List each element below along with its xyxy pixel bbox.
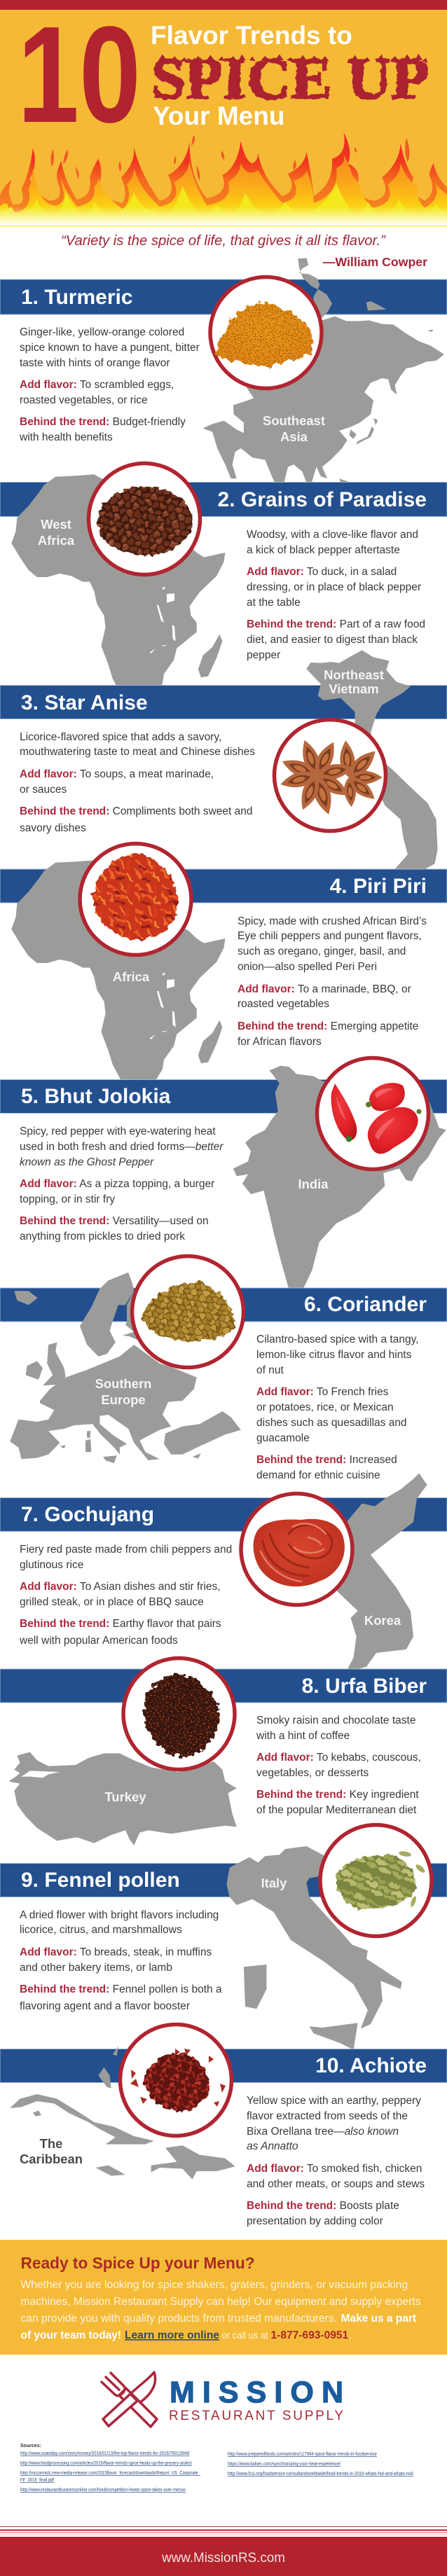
map label: West	[41, 517, 71, 532]
text: coriander description: dishes such as quesadillas and	[256, 1417, 407, 1429]
title: 4. Piri Piri: 4. Piri Piri	[330, 875, 427, 898]
text: star anise description: mouthwatering taste to meat and Chinese dishes	[20, 746, 255, 758]
map label: Caribbean	[20, 2152, 83, 2166]
photo circle: coriander	[132, 1256, 244, 1367]
body copy: Whether you are looking for spice shakers, graters, grinders, or vacuum packing	[21, 2279, 408, 2291]
text: star anise description: or sauces	[20, 784, 67, 796]
title: 10. Achiote: 10. Achiote	[315, 2054, 427, 2077]
text: achiote description: as Annatto	[247, 2140, 298, 2152]
heading band 4	[0, 869, 447, 903]
text: star anise description: savory dishes	[20, 822, 86, 834]
source links right column: https://www.kalsec.com/synchronizing-your-heat-experience/	[228, 2462, 341, 2467]
source links left column: http://mccormick.new-media-release.com/2015flavor_forecast/downloads/Report_US_Corporate_	[20, 2471, 200, 2476]
flames illustration	[0, 132, 447, 226]
panel: 4 Piri Piri	[0, 843, 447, 1083]
source links left column	[20, 2451, 200, 2493]
text: coriander description: guacamole	[256, 1432, 310, 1444]
source links left column: FF_2015_final.pdf	[20, 2478, 54, 2483]
text: coriander description: lemon-like citrus flavor and hints	[256, 1349, 412, 1361]
heading band 5	[0, 1080, 447, 1114]
map label: The	[40, 2136, 62, 2151]
text: urfa biber description: Behind the trend: Key ingredient	[256, 1789, 419, 1801]
panel: 10 Achiote	[0, 2024, 447, 2227]
body copy: 1-877-693-0951	[270, 2329, 349, 2341]
source links left column: http://www.restaurantbusinessonline.com/food/competition-heats-spice-takes-over-menus	[20, 2488, 186, 2493]
logo: Mission Restaurant Supply	[102, 2372, 343, 2427]
footer	[0, 2526, 447, 2576]
text: urfa biber description	[256, 1715, 421, 1816]
text: fennel description: licorice, citrus, and marshmallows	[20, 1924, 182, 1936]
panel: 5 Bhut Jolokia	[0, 1058, 447, 1291]
text: achiote description: Bixa Orellana tree—also known	[247, 2126, 399, 2138]
title: 6. Coriander: 6. Coriander	[304, 1293, 427, 1316]
text: urfa biber description: vegetables, or desserts	[256, 1767, 369, 1779]
text: gochujang description: glutinous rice	[20, 1559, 83, 1571]
source links right column: http://www.preparedfoods.com/articles/117694-spice-flavor-trends-in-foodservice	[228, 2452, 377, 2457]
text: achiote description: flavor extracted from seeds of the	[247, 2110, 408, 2122]
map label: Europe	[101, 1392, 146, 1407]
text: bhut jolokia description: Add flavor: As a pizza topping, a burger	[20, 1178, 214, 1190]
text: turmeric description: roasted vegetables, or rice	[20, 394, 148, 406]
heading: Ready to Spice Up your Menu?	[21, 2254, 255, 2272]
title line: SPICE UP: SPICE UP	[151, 46, 429, 111]
text: grains description: pepper	[247, 649, 280, 661]
panel: 3 Star Anise	[0, 650, 447, 871]
text: star anise description: Behind the trend: Compliments both sweet and	[20, 805, 252, 817]
text: grains description: at the table	[247, 597, 301, 609]
photo circle: star anise	[275, 720, 385, 831]
text: coriander description	[256, 1334, 418, 1481]
source links left column: http://www.usatoday.com/story/money/2016/01/13/the-top-flavor-trends-for-2016/78312948/	[20, 2451, 190, 2456]
text: grains description: a kick of black pepper aftertaste	[247, 544, 400, 556]
title line: Flavor Trends to: Flavor Trends to	[151, 21, 352, 50]
body copy: Learn more online	[125, 2329, 219, 2341]
title line: Your Menu: Your Menu	[153, 102, 284, 130]
text: coriander description: demand for ethnic cuisine	[256, 1469, 380, 1481]
text: urfa biber description: Smoky raisin and chocolate taste	[256, 1715, 415, 1726]
text: bhut jolokia description: anything from pickles to dried pork	[20, 1231, 185, 1242]
text: star anise description: Licorice-flavored spice that adds a savory,	[20, 731, 221, 743]
photo circle: fennel	[320, 1825, 432, 1936]
body copy	[21, 2279, 421, 2341]
wordmark: MISSION: MISSION	[170, 2376, 343, 2409]
text: bhut jolokia description: Spicy, red pepper with eye-watering heat	[20, 1126, 216, 1137]
title: 2. Grains of Paradise: 2. Grains of Paradise	[218, 488, 427, 511]
map: The Caribbean	[10, 2047, 235, 2180]
text: fennel description: and other bakery items, or lamb	[20, 1962, 172, 1974]
map label: Southeast	[263, 413, 325, 428]
text: piri piri description: Add flavor: To a marinade, BBQ, or	[238, 983, 411, 995]
photo circle: gochujang	[241, 1493, 352, 1605]
text: achiote description: Behind the trend: Boosts plate	[247, 2200, 399, 2212]
text: grains description: diet, and easier to digest than black	[247, 634, 418, 646]
map label: Africa	[113, 969, 150, 984]
photo circle: turmeric	[210, 277, 322, 388]
quote: “Variety is the spice of life, that gives it all its flavor.”	[61, 233, 386, 249]
source links left column: http://www.foodprocessing.com/articles/2015/flavor-trends-spice-heats-up-the-grocery-aisles/	[20, 2461, 192, 2466]
text: coriander description: or potatoes, rice, or Mexican	[256, 1401, 394, 1413]
text: gochujang description: grilled steak, or in place of BBQ sauce	[20, 1596, 204, 1608]
text: urfa biber description: Add flavor: To kebabs, couscous,	[256, 1752, 421, 1764]
yellow background	[0, 2240, 447, 2355]
map label: Turkey	[105, 1789, 146, 1804]
yellow header background	[0, 10, 447, 226]
text: turmeric description: with health benefits	[19, 431, 113, 443]
text: grains description: dressing, or in place of black pepper	[247, 581, 421, 593]
text: grains description: Woodsy, with a clove-like flavor and	[247, 529, 418, 541]
map: India	[233, 1066, 446, 1291]
text: turmeric description: spice known to have a pungent, bitter	[20, 342, 200, 354]
title: 5. Bhut Jolokia: 5. Bhut Jolokia	[21, 1085, 171, 1108]
map: Southern Europe	[10, 1273, 241, 1463]
panel: 7 Gochujang	[0, 1473, 447, 1672]
text: grains description: Behind the trend: Part of a raw food	[247, 618, 425, 630]
sources heading: Sources:	[20, 2444, 41, 2449]
footer band	[0, 2537, 447, 2576]
map: Asia	[203, 258, 444, 490]
map: West Africa	[11, 474, 225, 698]
map label: Korea	[364, 1613, 401, 1628]
text: achiote description	[247, 2095, 425, 2227]
text: piri piri description	[238, 915, 427, 1048]
top red bar	[0, 0, 447, 10]
map label: Africa	[38, 533, 75, 548]
map: Northeast Vietnam	[306, 650, 438, 871]
text: gochujang description: Fiery red paste made from chili peppers and	[20, 1544, 232, 1556]
panel: 1 Turmeric	[0, 258, 447, 490]
text: piri piri description: such as oregano, ginger, basil, and	[238, 946, 406, 957]
heading band 9	[0, 1863, 447, 1897]
panel: 2 Grains of Paradise	[0, 464, 447, 698]
panel: 6 Coriander	[0, 1256, 447, 1481]
heading band 8	[0, 1669, 447, 1703]
text: fennel description: Add flavor: To breads, steak, in muffins	[20, 1946, 212, 1958]
title: 9. Fennel pollen: 9. Fennel pollen	[21, 1869, 180, 1892]
map: Africa	[11, 860, 225, 1083]
map: Italy	[226, 1846, 402, 2050]
map label: India	[298, 1177, 329, 1191]
body copy: machines, Mission Restaurant Supply can help! Our equipment and supply experts	[21, 2296, 421, 2308]
text: urfa biber description: with a hint of coffee	[256, 1730, 350, 1742]
footer URL: www.MissionRS.com	[161, 2551, 285, 2565]
heading band 10	[0, 2049, 447, 2083]
text: fennel description: A dried flower with bright flavors including	[20, 1909, 219, 1921]
big number 10: 10	[18, 0, 141, 151]
text: urfa biber description: of the popular Mediterranean diet	[256, 1804, 417, 1816]
photo circle: grains of paradise	[88, 464, 200, 574]
photo circle: urfa biber	[123, 1659, 235, 1769]
panel: 9 Fennel pollen	[0, 1825, 447, 2050]
text: bhut jolokia description: Behind the trend: Versatility—used on	[20, 1215, 209, 1227]
text: fennel description: Behind the trend: Fennel pollen is both a	[20, 1983, 222, 1995]
text: coriander description: Add flavor: To French fries	[256, 1386, 389, 1398]
title: 7. Gochujang: 7. Gochujang	[21, 1503, 154, 1526]
text: gochujang description: well with popular American foods	[19, 1635, 178, 1647]
text: piri piri description: onion—also spelled Peri Peri	[238, 961, 377, 973]
panel: 8 Urfa Biber	[0, 1659, 447, 1846]
text: turmeric description	[19, 326, 200, 443]
text: gochujang description	[19, 1544, 232, 1647]
heading band 6	[0, 1288, 447, 1322]
body copy: .	[349, 2329, 352, 2341]
heading band 3	[0, 685, 447, 719]
text: gochujang description: Behind the trend: Earthy flavor that pairs	[20, 1618, 221, 1630]
heading band 1	[0, 279, 447, 314]
text: bhut jolokia description: topping, or in stir fry	[20, 1193, 115, 1205]
text: bhut jolokia description	[20, 1126, 224, 1242]
map label: Southern	[95, 1376, 151, 1391]
body copy: or call us at	[221, 2329, 268, 2341]
source links right column: http://www.fcsi.org/foodservice-consultant/worldwide/food-trends-in-2016-whats-hot-and-whats-not/	[228, 2472, 413, 2477]
map label: Vietnam	[329, 681, 379, 696]
text: bhut jolokia description: known as the Ghost Pepper	[20, 1156, 154, 1168]
text: piri piri description: Spicy, made with crushed African Bird’s	[238, 915, 427, 927]
source links right column	[228, 2452, 413, 2477]
text: piri piri description: Eye chili peppers and pungent flavors,	[238, 930, 422, 942]
title: 3. Star Anise: 3. Star Anise	[21, 691, 148, 714]
header banner	[0, 0, 447, 226]
heading band 2	[0, 482, 447, 517]
panel: call to action	[0, 2240, 447, 2355]
icon: crossed fork and knife	[102, 2372, 157, 2427]
photo circle: achiote	[121, 2024, 231, 2136]
text: achiote description: presentation by adding color	[247, 2215, 383, 2227]
wordmark: RESTAURANT SUPPLY: RESTAURANT SUPPLY	[169, 2409, 343, 2423]
text: turmeric description: Ginger-like, yellow-orange colored	[20, 326, 184, 338]
text: achiote description: and other meats, or soups and stews	[247, 2178, 425, 2190]
title: 8. Urfa Biber: 8. Urfa Biber	[302, 1675, 427, 1698]
text: piri piri description: Behind the trend: Emerging appetite	[238, 1020, 418, 1032]
text: achiote description: Add flavor: To smoked fish, chicken	[247, 2163, 422, 2175]
photo circle: piri piri	[80, 843, 191, 955]
heading band 7	[0, 1497, 447, 1531]
map label: Northeast	[324, 667, 384, 682]
text: turmeric description: Add flavor: To scrambled eggs,	[20, 379, 174, 391]
title: 1. Turmeric: 1. Turmeric	[21, 286, 133, 309]
text: grains description	[247, 529, 425, 661]
map: Turkey	[8, 1752, 237, 1846]
text: bhut jolokia description: used in both fresh and dried forms—better	[20, 1141, 224, 1153]
text: coriander description: Cilantro-based spice with a tangy,	[256, 1334, 418, 1345]
text: turmeric description: Behind the trend: Budget-friendly	[20, 416, 186, 428]
text: turmeric description: taste with hints of orange flavor	[20, 357, 170, 369]
text: achiote description: Yellow spice with an earthy, peppery	[247, 2095, 421, 2107]
text: fennel description: flavoring agent and a flavor booster	[20, 2000, 190, 2012]
quote attribution: —William Cowper	[323, 255, 427, 269]
text: star anise description: Add flavor: To soups, a meat marinade,	[20, 768, 214, 780]
body copy: of your team today!	[21, 2329, 121, 2341]
text: star anise description	[20, 731, 255, 834]
text: coriander description: Behind the trend: Increased	[256, 1454, 397, 1466]
text: fennel description	[20, 1909, 222, 2012]
text: gochujang description: Add flavor: To Asian dishes and stir fries,	[20, 1581, 221, 1593]
text: piri piri description: for African flavors	[238, 1036, 322, 1048]
body copy: Make us a part	[341, 2313, 416, 2325]
sources	[20, 2444, 413, 2493]
text: piri piri description: roasted vegetables	[238, 998, 329, 1010]
photo circle: bhut jolokia	[317, 1058, 429, 1170]
map label: Italy	[261, 1876, 287, 1890]
body copy: can provide you with quality products from trusted manufacturers.	[21, 2313, 337, 2325]
text: grains description: Add flavor: To duck, in a salad	[247, 566, 397, 578]
text: coriander description: of nut	[256, 1364, 284, 1376]
map: Korea	[314, 1473, 427, 1672]
map label: Asia	[280, 429, 308, 444]
